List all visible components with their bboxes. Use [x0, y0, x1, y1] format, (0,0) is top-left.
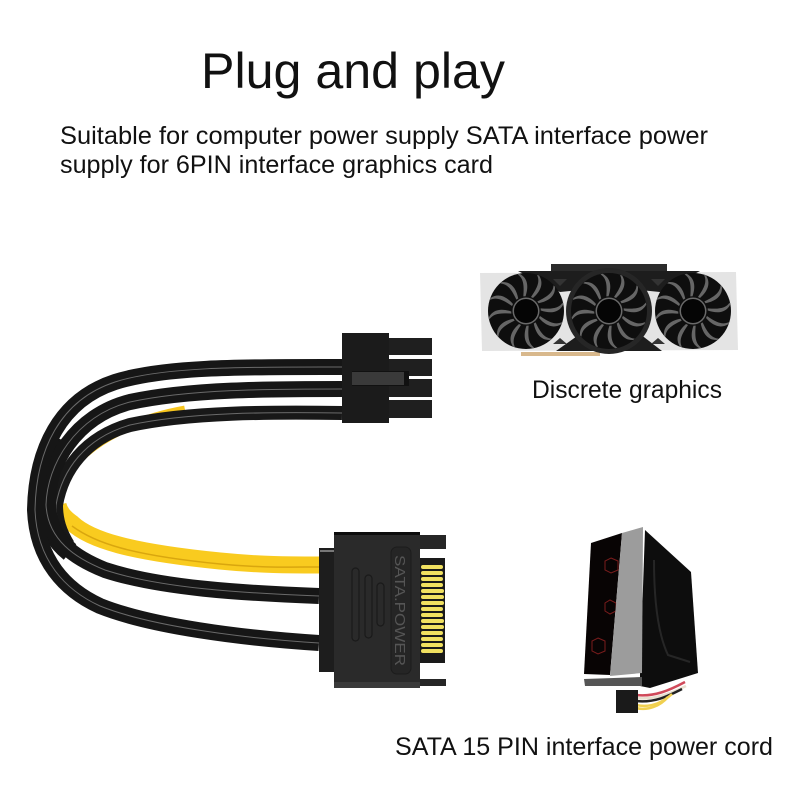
description text: supply for 6PIN interface graphics card [60, 151, 493, 179]
embossed grooves [352, 568, 384, 641]
power cord [636, 682, 686, 709]
cable bundle [35, 367, 342, 643]
description text: Suitable for computer power supply SATA interface power [60, 122, 708, 150]
6-pin connector [342, 333, 432, 423]
embossed SATA.POWER label: SATA.POWER [391, 555, 408, 666]
inner black wires [56, 413, 342, 545]
fan right [654, 272, 732, 350]
yellow wires [55, 410, 319, 567]
SATA caption: SATA 15 PIN interface power cord [395, 733, 773, 761]
black wires to middle SATA port [46, 389, 342, 596]
fan centre [566, 268, 652, 354]
computer case image [584, 527, 698, 713]
black wires to lower SATA port [35, 367, 342, 643]
fan left [487, 272, 565, 350]
discrete graphics caption: Discrete graphics [532, 376, 722, 404]
title: Plug and play [201, 43, 505, 99]
description text [60, 122, 708, 179]
embossed SATA.POWER label [391, 547, 411, 674]
bend shadow joining wires [46, 440, 70, 552]
connector latch [352, 371, 409, 386]
contact block [420, 558, 445, 663]
graphics card image [480, 264, 738, 356]
SATA connector [319, 532, 446, 688]
